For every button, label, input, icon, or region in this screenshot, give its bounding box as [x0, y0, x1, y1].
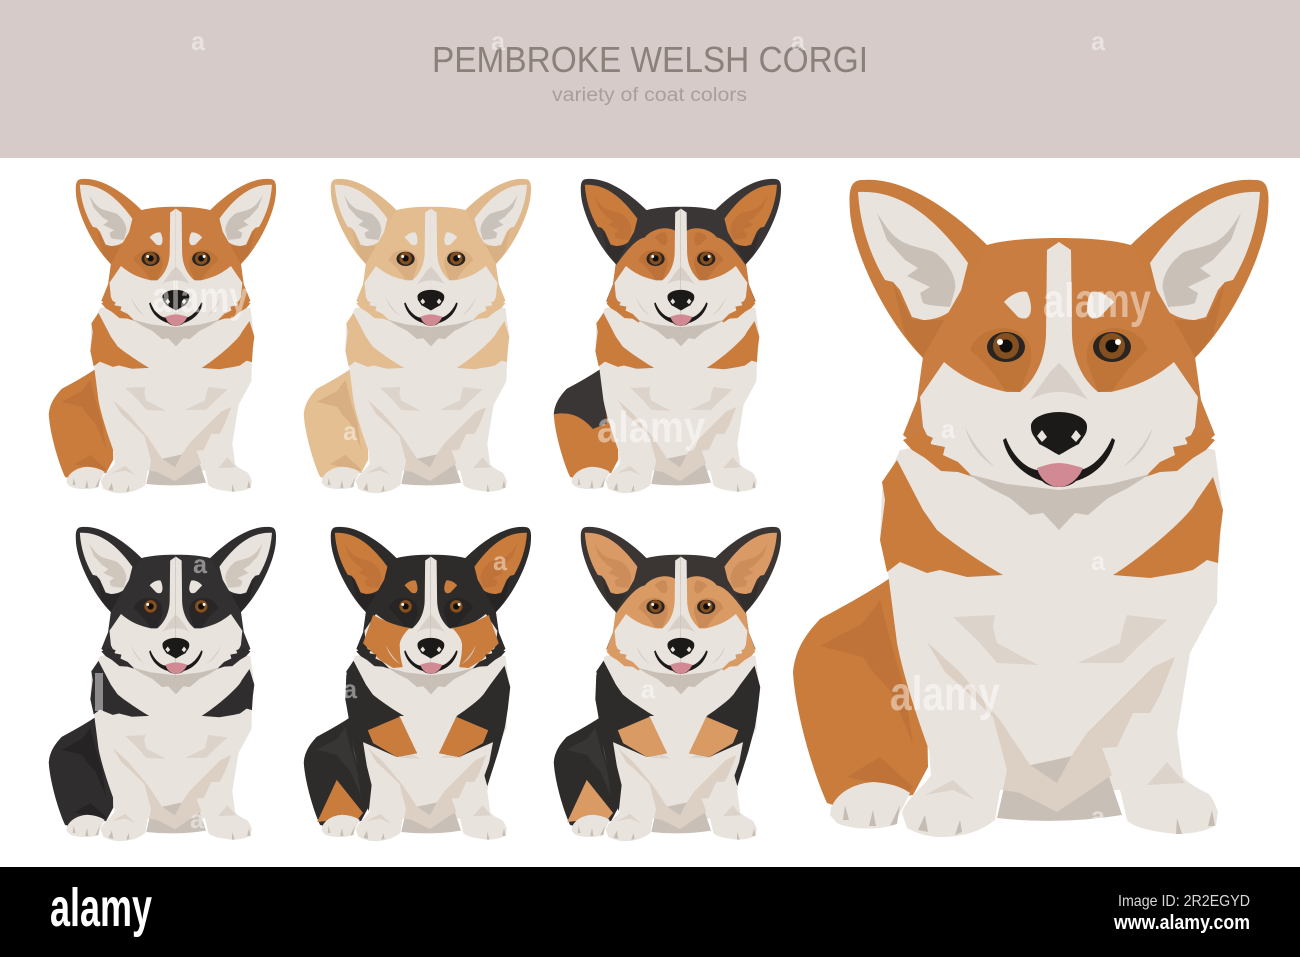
watermarks: a	[1091, 26, 1106, 56]
watermarks	[95, 26, 1151, 834]
title: PEMBROKE WELSH CORGI	[432, 39, 868, 80]
watermarks: a	[190, 804, 205, 834]
header band	[0, 0, 1300, 158]
watermarks: alamy	[890, 668, 1000, 721]
watermarks: a	[641, 674, 656, 704]
dog: black-headed tricolor	[304, 527, 531, 841]
watermarks: a	[1091, 546, 1106, 576]
dog: tricolor with light tan points	[554, 527, 781, 841]
watermarks: a	[343, 416, 358, 446]
watermarks: alamy	[1043, 275, 1151, 328]
image id: Image ID: 2R2EGYD	[1118, 893, 1250, 910]
subtitle: variety of coat colors	[552, 85, 747, 106]
dog: black and white	[49, 527, 276, 841]
dog: red-headed tricolor	[554, 179, 781, 493]
watermarks: a	[343, 674, 358, 704]
watermarks: a	[941, 414, 956, 444]
watermarks: a	[493, 546, 508, 576]
website: www.alamy.com	[1113, 912, 1250, 934]
watermarks: a	[491, 26, 506, 56]
footer logo: alamy	[50, 878, 152, 938]
watermarks: a	[791, 26, 806, 56]
watermarks: alamy	[597, 403, 705, 452]
watermarks: a	[191, 26, 206, 56]
footer bar	[0, 867, 1300, 957]
watermarks: alamy	[152, 273, 248, 322]
dog: fawn and white	[304, 179, 531, 493]
dog: red and white	[49, 179, 276, 493]
dog: large red and white portrait	[793, 180, 1269, 837]
watermarks: a	[1091, 801, 1106, 831]
watermarks: a	[193, 549, 208, 579]
